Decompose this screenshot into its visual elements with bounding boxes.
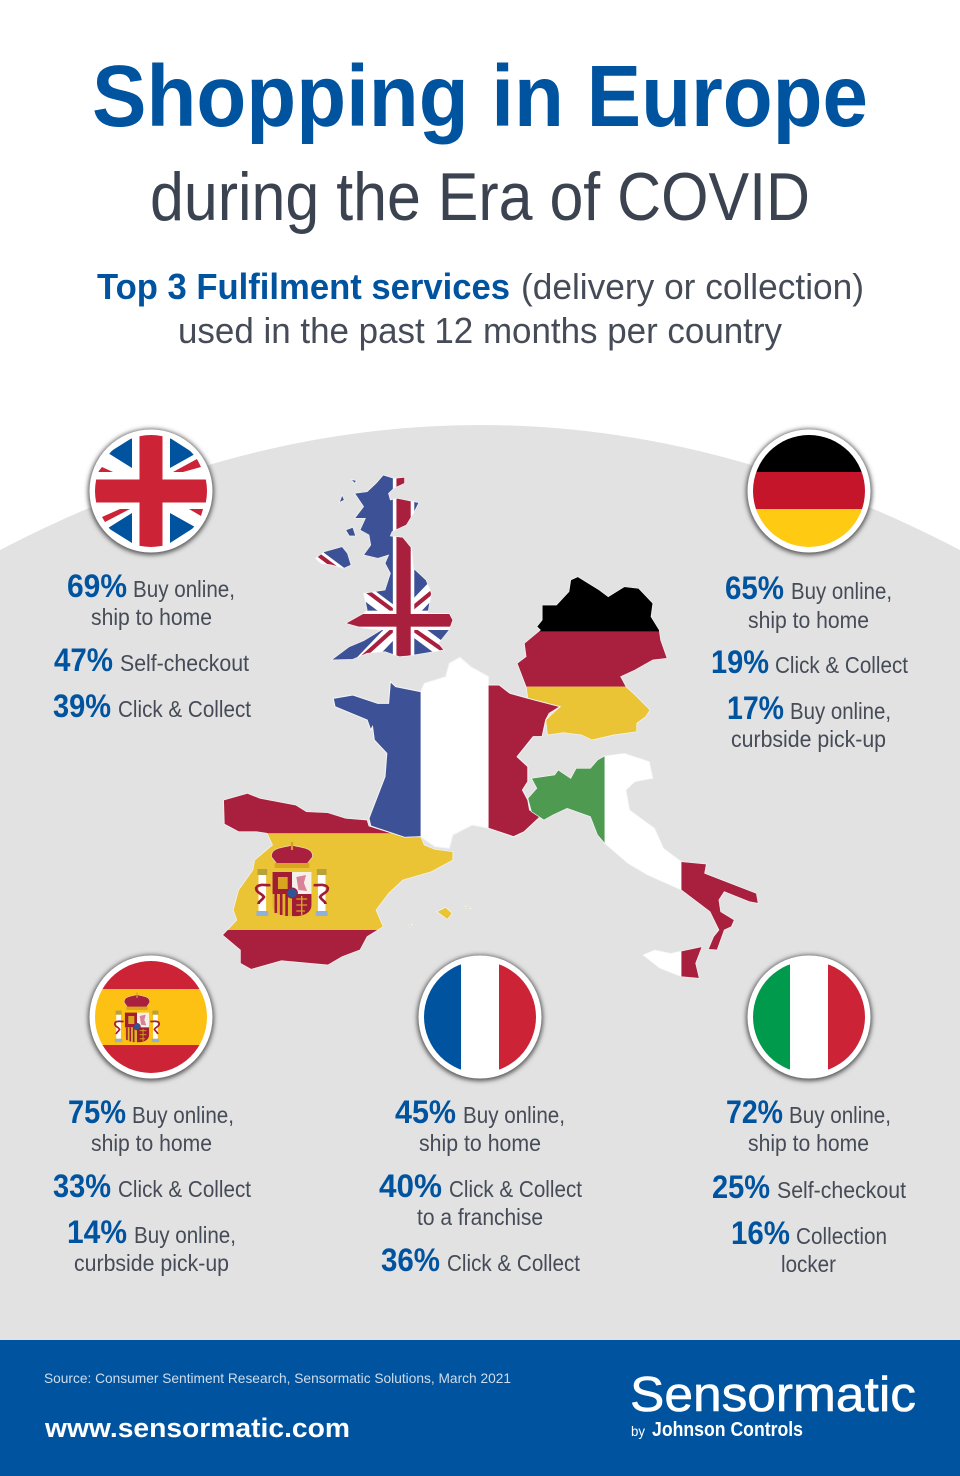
logo: Sensormatic xyxy=(630,1368,916,1422)
flag map of Europe xyxy=(221,460,764,983)
map: United Kingdom xyxy=(315,474,453,660)
stats: Italy: Self-checkout xyxy=(777,1177,907,1203)
map: France xyxy=(331,657,564,850)
stats: Germany: Buy online, xyxy=(791,578,892,604)
stats: France: 36% xyxy=(381,1242,440,1278)
stats: Italy: Collection xyxy=(796,1223,887,1249)
map: Spain xyxy=(221,790,471,973)
stats: United Kingdom: Click & Collect xyxy=(118,696,252,722)
stats: Spain xyxy=(53,1094,252,1276)
stats: United Kingdom: 69% xyxy=(67,568,127,604)
flag badge: Spain xyxy=(88,955,214,1081)
stats: Italy: locker xyxy=(781,1251,836,1277)
subtitle: used in the past 12 months per country xyxy=(178,310,782,351)
stats: France: ship to home xyxy=(419,1130,541,1156)
stats: France: Click & Collect xyxy=(449,1176,583,1202)
footer xyxy=(0,1340,960,1476)
stats: Spain: Buy online, xyxy=(134,1222,236,1248)
grey background arc xyxy=(0,425,960,1340)
title: Shopping in Europe xyxy=(92,48,868,145)
stats: Italy: 25% xyxy=(712,1169,770,1205)
stats: Spain: 75% xyxy=(68,1094,126,1130)
stats: Spain: 33% xyxy=(53,1168,111,1204)
stats: Germany: 19% xyxy=(711,644,769,680)
subtitle: Top 3 Fulfilment services xyxy=(97,266,510,307)
logo: by xyxy=(631,1423,645,1439)
flag badge: United Kingdom xyxy=(88,429,214,555)
stats: Germany: Click & Collect xyxy=(775,652,909,678)
stats: Germany: 65% xyxy=(725,570,784,606)
stats: United Kingdom: ship to home xyxy=(91,604,212,630)
stats: Germany: curbside pick-up xyxy=(731,726,886,752)
stats: Spain: Buy online, xyxy=(132,1102,234,1128)
stats: United Kingdom: Self-checkout xyxy=(120,650,250,676)
stats: Spain: ship to home xyxy=(91,1130,212,1156)
source note: Source: Consumer Sentiment Research, Sensormatic Solutions, March 2021 xyxy=(44,1370,511,1386)
stats: Germany xyxy=(711,570,909,752)
stats: France: 40% xyxy=(379,1168,442,1204)
flag badge: Germany xyxy=(746,429,872,555)
stats: France: to a franchise xyxy=(417,1204,543,1230)
stats: France xyxy=(379,1094,583,1278)
logo: Johnson Controls xyxy=(652,1419,803,1441)
icon: Spanish coat of arms on map xyxy=(256,842,328,916)
stats: United Kingdom: Buy online, xyxy=(133,576,235,602)
flag badge: Italy xyxy=(746,955,872,1081)
subtitle: (delivery or collection) xyxy=(521,266,864,307)
stats: Italy: 72% xyxy=(726,1094,783,1130)
subtitle xyxy=(97,266,864,351)
title xyxy=(92,48,868,235)
stats: Spain: 14% xyxy=(67,1214,127,1250)
stats: Italy xyxy=(712,1094,907,1277)
stats: France: 45% xyxy=(395,1094,456,1130)
stats: Spain: curbside pick-up xyxy=(74,1250,229,1276)
map: Germany xyxy=(514,573,671,743)
stats: Spain: Click & Collect xyxy=(118,1176,252,1202)
stats: Italy: 16% xyxy=(731,1215,790,1251)
flag badge: France xyxy=(417,955,543,1081)
stats: Germany: 17% xyxy=(727,690,784,726)
map: Italy xyxy=(524,750,764,983)
stats: Germany: Buy online, xyxy=(790,698,891,724)
stats: Italy: Buy online, xyxy=(789,1102,891,1128)
title: during the Era of COVID xyxy=(150,159,810,235)
stats: Germany: ship to home xyxy=(748,607,869,633)
stats: United Kingdom: 39% xyxy=(53,688,111,724)
stats: France: Buy online, xyxy=(463,1102,565,1128)
stats: Italy: ship to home xyxy=(748,1130,869,1156)
stats: United Kingdom xyxy=(53,568,252,724)
stats: United Kingdom: 47% xyxy=(54,642,113,678)
stats: France: Click & Collect xyxy=(447,1250,581,1276)
website: www.sensormatic.com xyxy=(44,1413,350,1443)
